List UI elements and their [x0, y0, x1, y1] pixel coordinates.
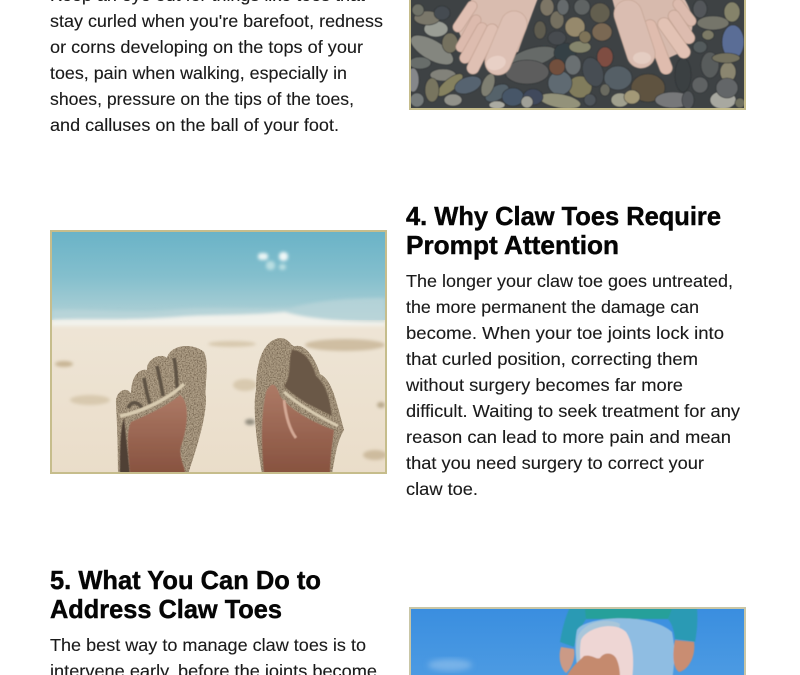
text block: why treatment matters: that you need surgery to correct your — [406, 453, 704, 473]
text block: why treatment matters: The longer your claw toe goes untreated, — [406, 271, 733, 291]
heading: what you can do to address claw toes: 5. What You Can Do to — [50, 565, 321, 595]
text block: why treatment matters: that curled position, correcting them — [406, 349, 698, 369]
photo: child's foot against blue sky — [409, 607, 746, 675]
text block: early intervention — [50, 635, 377, 675]
icon: teal jacket — [560, 607, 697, 647]
text block: symptoms paragraph: toes, pain when walking, especially in — [50, 63, 347, 83]
icon: raised toes — [565, 654, 620, 675]
text block: symptoms paragraph: shoes, pressure on the tips of the toes, — [50, 89, 354, 109]
icon: hands — [560, 647, 574, 673]
icon: shorts — [575, 618, 674, 675]
text block: why treatment matters — [405, 271, 740, 499]
text block: why treatment matters: the more permanent the damage can — [406, 297, 699, 317]
text block: why treatment matters: without surgery becomes far more — [405, 375, 683, 395]
icon: left foot — [458, 0, 538, 72]
photo: bare feet on pebbles — [406, 0, 746, 112]
heading: why claw toes require prompt attention: 4. Why Claw Toes Require — [406, 201, 721, 231]
heading: why claw toes require prompt attention: Prompt Attention — [406, 230, 619, 260]
heading: what you can do to address claw toes — [50, 565, 321, 624]
text block: why treatment matters: difficult. Waiting to seek treatment for any — [406, 401, 740, 421]
text block: symptoms paragraph: or corns developing on the tops of your — [50, 37, 363, 57]
icon: right foot — [612, 0, 693, 68]
heading: what you can do to address claw toes: Address Claw Toes — [50, 594, 282, 624]
photo: sandy feet on a beach — [50, 230, 387, 474]
icon: left sandy foot — [116, 346, 207, 474]
text block: symptoms paragraph: stay curled when you're barefoot, redness — [50, 11, 383, 31]
text block: symptoms paragraph: and calluses on the ball of your foot. — [50, 115, 339, 135]
text block: early intervention: The best way to manage claw toes is to — [50, 635, 366, 655]
text block: why treatment matters: reason can lead to more pain and mean — [406, 427, 731, 447]
text block: why treatment matters: claw toe. — [406, 479, 478, 499]
icon: right sandy foot — [255, 338, 344, 474]
text block: symptoms paragraph — [50, 0, 383, 135]
text block: why treatment matters: become. When your toe joints lock into — [406, 323, 724, 343]
heading: why claw toes require prompt attention — [406, 201, 721, 260]
